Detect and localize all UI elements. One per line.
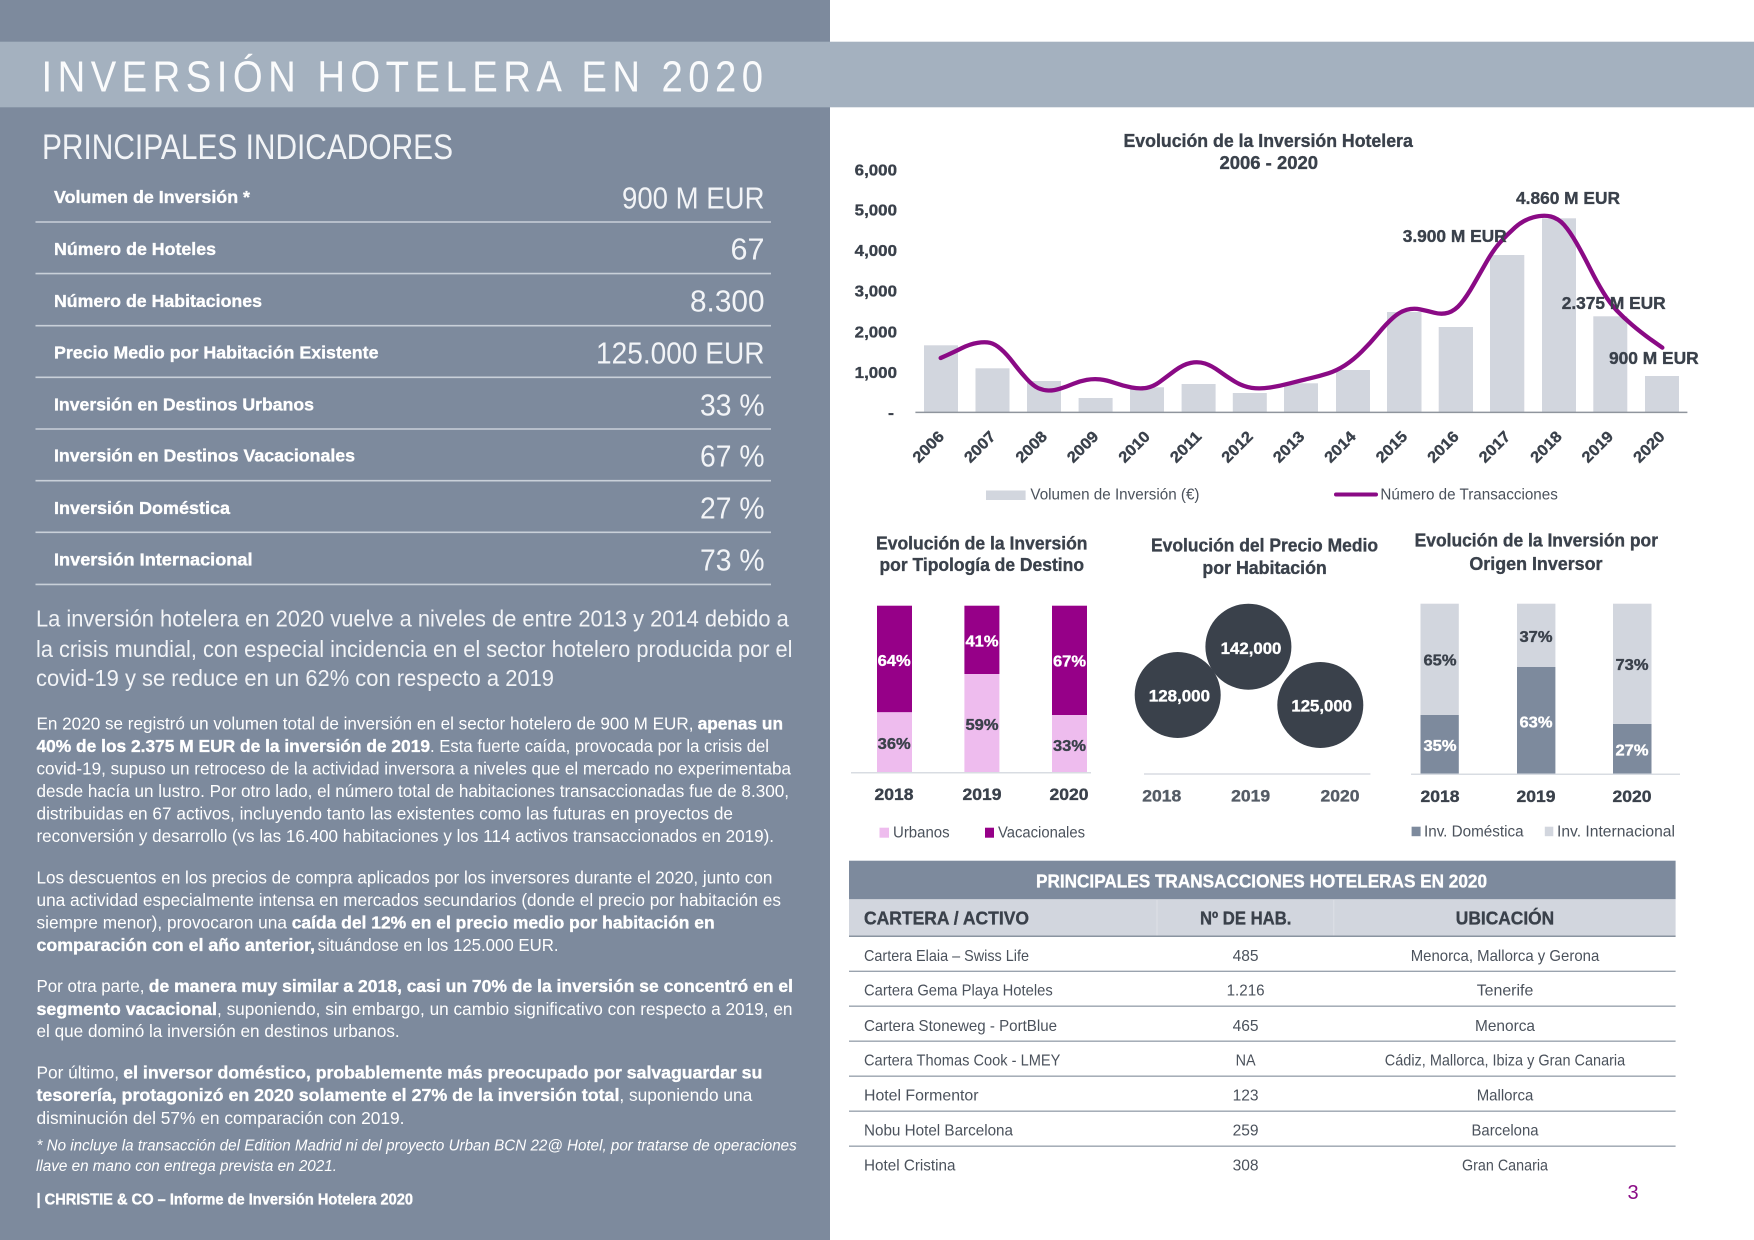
bubble values <box>1149 640 1352 716</box>
indicator: inversión doméstica: Inversión Doméstica <box>54 498 230 518</box>
paragraph 4: , suponiendo una <box>619 1085 753 1105</box>
chart title: por Habitación <box>1202 558 1327 578</box>
row: nobu hotel: Nobu Hotel Barcelona <box>864 1123 1013 1140</box>
x axis years: 2020 <box>1630 428 1669 466</box>
table column headers: Nº DE HAB. <box>1200 908 1291 928</box>
paragraph 3 <box>36 976 793 1041</box>
stacked bars <box>877 606 1087 772</box>
percent labels <box>1424 629 1649 759</box>
paragraph 1: . Esta fuerte caída, provocada por la crisis del <box>430 736 769 756</box>
x axis years: 2017 <box>1476 428 1514 466</box>
paragraph 2: siempre menor), provocaron una <box>36 913 287 933</box>
chart title <box>1415 531 1658 574</box>
row: nobu hotel: 259 <box>1233 1123 1259 1140</box>
indicator: inversión internacional <box>36 543 771 584</box>
row: cartera thomas cook: Cartera Thomas Cook - LMEY <box>864 1053 1061 1070</box>
chart title <box>1124 131 1414 173</box>
table title bar <box>849 861 1676 899</box>
row: hotel cristina: Gran Canaria <box>1462 1158 1548 1175</box>
y axis labels <box>855 162 897 422</box>
data labels: 3.900 M EUR <box>1403 226 1507 246</box>
heading: principales indicadores: PRINCIPALES INDICADORES <box>42 128 453 167</box>
row: cartera gema: Cartera Gema Playa Hoteles <box>864 983 1053 1000</box>
row: hotel cristina <box>864 1158 1548 1175</box>
paragraph 1: desde hacía un lustro. Por otro lado, el número total de habitaciones transaccionadas fue de 8.300, <box>36 781 789 801</box>
percent labels: 63% <box>1520 714 1553 731</box>
legend: Vacacionales <box>998 824 1085 841</box>
indicator: destinos vacacionales <box>36 439 771 481</box>
row: nobu hotel: Barcelona <box>1472 1123 1539 1140</box>
percent labels: 65% <box>1424 653 1457 670</box>
years: 2020 <box>1320 788 1360 806</box>
title: INVERSIÓN HOTELERA EN 2020 <box>42 52 763 101</box>
years <box>1142 788 1360 806</box>
legend <box>986 487 1558 504</box>
indicator: número de hoteles: 67 <box>730 232 764 267</box>
chart title: Evolución de la Inversión por <box>1415 531 1658 551</box>
x axis years: 2007 <box>961 428 999 466</box>
paragraph 2: una actividad especialmente intensa en mercados secundarios (donde el precio por habitación es <box>36 890 781 910</box>
row: hotel formentor: Hotel Formentor <box>864 1088 979 1105</box>
row: cartera thomas cook: Cádiz, Mallorca, Ibiza y Gran Canaria <box>1385 1053 1625 1070</box>
source: | CHRISTIE & CO – Informe de Inversión Hotelera 2020 <box>36 1191 413 1208</box>
bubbles <box>1135 604 1363 748</box>
paragraph 3: segmento vacacional <box>36 999 217 1019</box>
investment bars <box>924 218 1679 412</box>
percent labels: 33% <box>1053 738 1086 755</box>
data labels: 4.860 M EUR <box>1516 188 1620 208</box>
years: 2018 <box>874 786 914 804</box>
y axis labels: 6,000 <box>855 162 897 179</box>
y axis labels: - <box>888 405 894 422</box>
paragraph 3: , suponiendo, sin embargo, un cambio significativo con respecto a 2019, en <box>217 999 792 1019</box>
footnote: llave en mano con entrega prevista en 2021. <box>36 1158 337 1175</box>
indicator: destinos urbanos: Inversión en Destinos Urbanos <box>54 395 314 415</box>
percent labels: 73% <box>1616 657 1649 674</box>
years: 2018 <box>1142 788 1181 806</box>
chart title <box>1151 536 1378 578</box>
percent labels <box>878 633 1086 755</box>
x axis years: 2019 <box>1579 428 1617 466</box>
years: 2019 <box>962 786 1002 804</box>
paragraph 3: Por otra parte, <box>36 976 144 996</box>
intro paragraph: covid-19 y se reduce en un 62% con respecto a 2019 <box>36 665 554 691</box>
indicator: número de hoteles: Número de Hoteles <box>54 239 216 259</box>
chart title: por Tipología de Destino <box>880 555 1084 575</box>
paragraph 4: tesorería, protagonizó en 2020 solamente el 27% de la inversión total <box>36 1085 619 1105</box>
chart title: Origen Inversor <box>1469 554 1602 574</box>
indicator: destinos urbanos <box>36 387 771 429</box>
years: 2018 <box>1420 788 1460 806</box>
indicator: inversión internacional: Inversión Internacional <box>54 550 252 570</box>
paragraph 1: distribuidas en 67 activos, incluyendo tanto las existentes como las futuras en proyectos de <box>36 804 733 824</box>
table title bar: PRINCIPALES TRANSACCIONES HOTELERAS EN 2020 <box>1036 872 1487 892</box>
row: cartera stoneweg: 465 <box>1233 1018 1259 1035</box>
chart: tipología de destino <box>851 533 1091 841</box>
percent labels: 36% <box>878 736 911 753</box>
table column headers <box>849 899 1676 936</box>
row: cartera elaia: Menorca, Mallorca y Gerona <box>1411 948 1599 965</box>
x axis years: 2006 <box>910 428 948 466</box>
data labels <box>1403 188 1699 368</box>
row: hotel cristina: Hotel Cristina <box>864 1158 956 1175</box>
paragraph 2: situándose en los 125.000 EUR. <box>318 935 558 955</box>
title band <box>0 42 1754 107</box>
indicator: inversión internacional: 73 % <box>700 543 764 578</box>
paragraph 1: En 2020 se registró un volumen total de inversión en el sector hotelero de 900 M EUR, <box>36 714 694 734</box>
row: cartera gema <box>864 983 1533 1000</box>
legend: Número de Transacciones <box>1380 487 1558 504</box>
paragraph 4: el inversor doméstico, probablemente más preocupado por salvaguardar su <box>123 1062 762 1082</box>
percent labels: 27% <box>1616 742 1649 759</box>
footnote <box>36 1138 797 1175</box>
chart title: Evolución de la Inversión Hotelera <box>1124 131 1414 151</box>
table column headers: CARTERA / ACTIVO <box>864 908 1029 928</box>
chart title <box>876 533 1088 575</box>
data labels: 2.375 M EUR <box>1562 293 1666 313</box>
chart: evolución de la inversión hotelera <box>855 131 1699 504</box>
row: hotel formentor <box>864 1088 1533 1105</box>
paragraph 4: disminución del 57% en comparación con 2019. <box>36 1108 404 1128</box>
years <box>1420 788 1652 806</box>
x axis years: 2011 <box>1167 428 1206 466</box>
table column headers: UBICACIÓN <box>1456 908 1554 928</box>
x axis years: 2014 <box>1321 428 1360 466</box>
paragraph 2: Los descuentos en los precios de compra aplicados por los inversores durante el 2020, junto con <box>36 868 772 888</box>
legend: Volumen de Inversión (€) <box>1030 487 1200 504</box>
x axis years: 2015 <box>1373 428 1411 466</box>
row: nobu hotel <box>864 1123 1539 1140</box>
paragraph 3: el que dominó la inversión en destinos urbanos. <box>36 1021 400 1041</box>
percent labels: 37% <box>1520 629 1553 646</box>
years: 2020 <box>1612 788 1652 806</box>
legend: Inv. Internacional <box>1557 824 1675 841</box>
row: hotel formentor: Mallorca <box>1477 1088 1533 1105</box>
chart title: Evolución de la Inversión <box>876 533 1088 553</box>
bubble values: 128,000 <box>1149 688 1210 706</box>
indicator: precio medio: Precio Medio por Habitación Existente <box>54 343 379 363</box>
x axis years: 2010 <box>1116 428 1154 466</box>
paragraph 1: apenas un <box>698 714 783 734</box>
paragraph 1: reconversión y desarrollo (vs las 16.400 habitaciones y los 114 activos transaccionados en 2019). <box>36 826 774 846</box>
paragraph 1 <box>36 714 791 846</box>
paragraph 4: Por último, <box>36 1062 119 1082</box>
percent labels: 67% <box>1053 654 1086 671</box>
percent labels: 35% <box>1424 738 1457 755</box>
intro paragraph: la crisis mundial, con especial incidencia en el sector hotelero producida por el <box>36 636 792 662</box>
indicator: número de habitaciones: 8.300 <box>690 284 764 319</box>
y axis labels: 4,000 <box>855 243 897 260</box>
y axis labels: 1,000 <box>855 365 897 382</box>
paragraph 1: covid-19, supuso un retroceso de la actividad inversora a niveles que el mercado no experimentaba <box>36 759 791 779</box>
bubble values: 125,000 <box>1291 698 1352 716</box>
row: cartera stoneweg: Cartera Stoneweg - PortBlue <box>864 1018 1057 1035</box>
legend <box>1412 824 1675 841</box>
chart title: 2006 - 2020 <box>1220 153 1318 173</box>
chart title: Evolución del Precio Medio <box>1151 536 1378 556</box>
row: hotel cristina: 308 <box>1233 1158 1259 1175</box>
percent labels: 41% <box>966 633 999 650</box>
row: cartera elaia: Cartera Elaia – Swiss Life <box>864 948 1029 965</box>
chart: origen inversor <box>1411 531 1680 841</box>
indicator: precio medio: 125.000 EUR <box>596 335 764 370</box>
x axis years: 2016 <box>1424 428 1463 466</box>
row: cartera thomas cook: NA <box>1236 1053 1256 1070</box>
x axis years: 2009 <box>1064 428 1103 466</box>
x axis years: 2008 <box>1013 428 1051 466</box>
stacked bars <box>1420 604 1652 774</box>
transactions line <box>941 216 1662 391</box>
paragraph 4 <box>36 1062 762 1128</box>
indicator: volumen de inversión: 900 M EUR <box>622 180 764 215</box>
data labels: 900 M EUR <box>1609 348 1699 368</box>
paragraph 2 <box>36 868 781 955</box>
row: cartera gema: 1.216 <box>1227 983 1265 1000</box>
years: 2019 <box>1231 788 1270 806</box>
footnote: * No incluye la transacción del Edition Madrid ni del proyecto Urban BCN 22@ Hotel, por tratarse de operaciones <box>36 1138 797 1155</box>
indicator: destinos urbanos: 33 % <box>700 387 764 422</box>
intro paragraph <box>36 606 792 691</box>
indicator: precio medio <box>36 335 771 377</box>
indicator: inversión doméstica <box>36 491 771 532</box>
row: cartera thomas cook <box>864 1053 1625 1070</box>
row: cartera gema: Tenerife <box>1477 983 1533 1000</box>
paragraph 2: comparación con el año anterior, <box>36 935 315 955</box>
indicator: número de habitaciones <box>36 284 771 326</box>
indicator: destinos vacacionales: 67 % <box>700 439 764 474</box>
percent labels: 59% <box>966 717 999 734</box>
x axis years: 2012 <box>1219 428 1257 466</box>
y axis labels: 5,000 <box>855 203 897 220</box>
years: 2020 <box>1050 786 1088 804</box>
row: cartera elaia: 485 <box>1233 948 1259 965</box>
page number: 3 <box>1627 1182 1639 1204</box>
intro paragraph: La inversión hotelera en 2020 vuelve a niveles de entre 2013 y 2014 debido a <box>36 606 790 632</box>
row: cartera stoneweg <box>864 1018 1535 1035</box>
y axis labels: 2,000 <box>855 325 897 342</box>
indicator: número de hoteles <box>36 232 771 274</box>
x axis years <box>910 428 1669 466</box>
row: cartera stoneweg: Menorca <box>1475 1018 1535 1035</box>
row: hotel formentor: 123 <box>1233 1088 1259 1105</box>
indicator: destinos vacacionales: Inversión en Destinos Vacacionales <box>54 446 355 466</box>
legend: Inv. Doméstica <box>1424 824 1524 841</box>
percent labels: 64% <box>878 653 911 670</box>
x axis years: 2013 <box>1270 428 1309 466</box>
paragraph 2: caída del 12% en el precio medio por habitación en <box>292 913 715 933</box>
chart: precio medio por habitación <box>1135 536 1378 806</box>
left panel background <box>0 0 830 1240</box>
indicator: volumen de inversión: Volumen de Inversión * <box>54 187 250 207</box>
y axis labels: 3,000 <box>855 284 897 301</box>
years <box>874 786 1088 804</box>
years: 2019 <box>1516 788 1556 806</box>
indicator: inversión doméstica: 27 % <box>700 491 764 526</box>
legend: Urbanos <box>893 824 950 841</box>
table: principales transacciones <box>849 861 1676 1175</box>
paragraph 3: de manera muy similar a 2018, casi un 70% de la inversión se concentró en el <box>149 976 793 996</box>
x axis years: 2018 <box>1527 428 1566 466</box>
row: cartera elaia <box>864 948 1599 965</box>
indicators table <box>36 180 771 584</box>
bubble values: 142,000 <box>1221 640 1281 658</box>
legend <box>880 824 1085 841</box>
paragraph 1: 40% de los 2.375 M EUR de la inversión de 2019 <box>36 736 430 756</box>
indicator: volumen de inversión <box>36 180 771 222</box>
indicator: número de habitaciones: Número de Habitaciones <box>54 291 262 311</box>
